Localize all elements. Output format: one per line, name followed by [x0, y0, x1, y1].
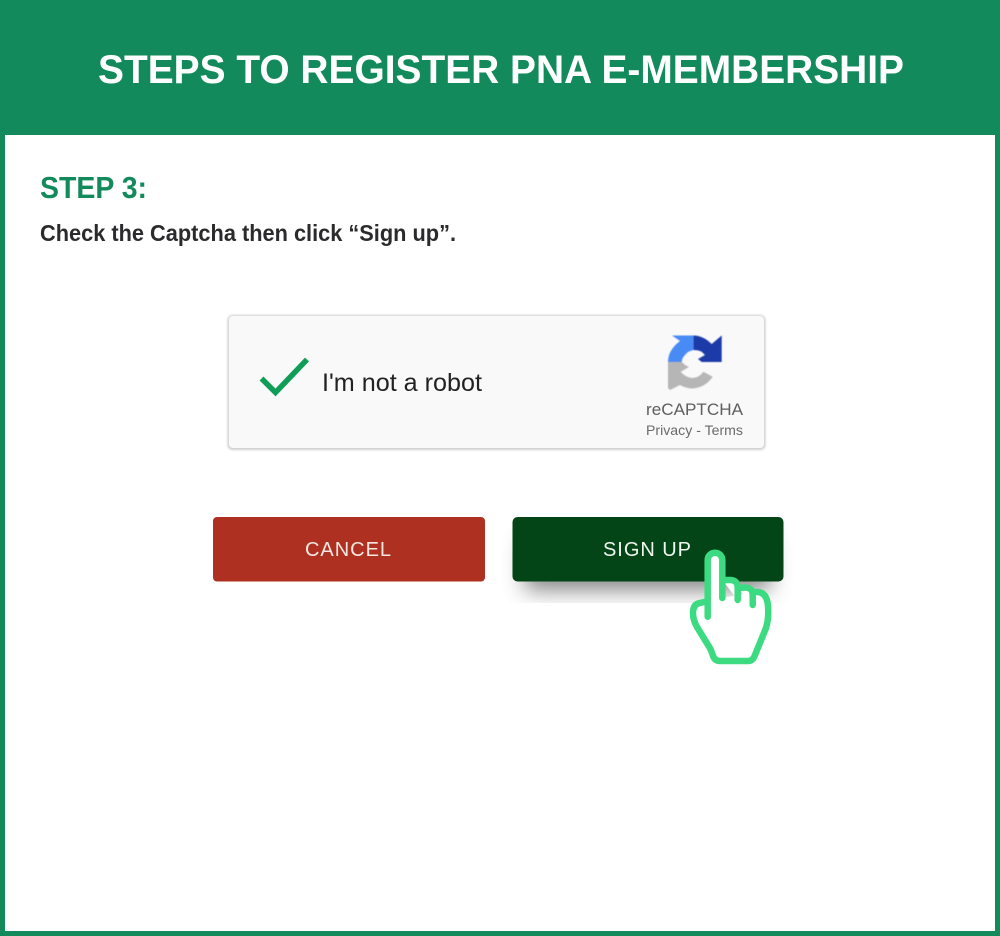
panel: captcha widget [228, 315, 766, 450]
privacy and terms links: Privacy - Terms [646, 423, 743, 438]
icon: pointing hand [693, 553, 768, 661]
step heading: STEP 3: [40, 170, 147, 205]
icon: reCAPTCHA logo [668, 336, 722, 390]
header banner [0, 0, 1000, 135]
button: cancel: CANCEL [305, 539, 391, 561]
step instruction: Check the Captcha then click “Sign up”. [40, 220, 456, 246]
reCAPTCHA label: reCAPTCHA [646, 401, 743, 419]
button: sign up [512, 517, 784, 590]
icon: green check mark [262, 360, 307, 392]
button: sign up: SIGN UP [603, 539, 691, 561]
title: STEPS TO REGISTER PNA E-MEMBERSHIP [98, 48, 904, 92]
captcha label: I'm not a robot [322, 369, 482, 397]
button: cancel [213, 517, 485, 582]
